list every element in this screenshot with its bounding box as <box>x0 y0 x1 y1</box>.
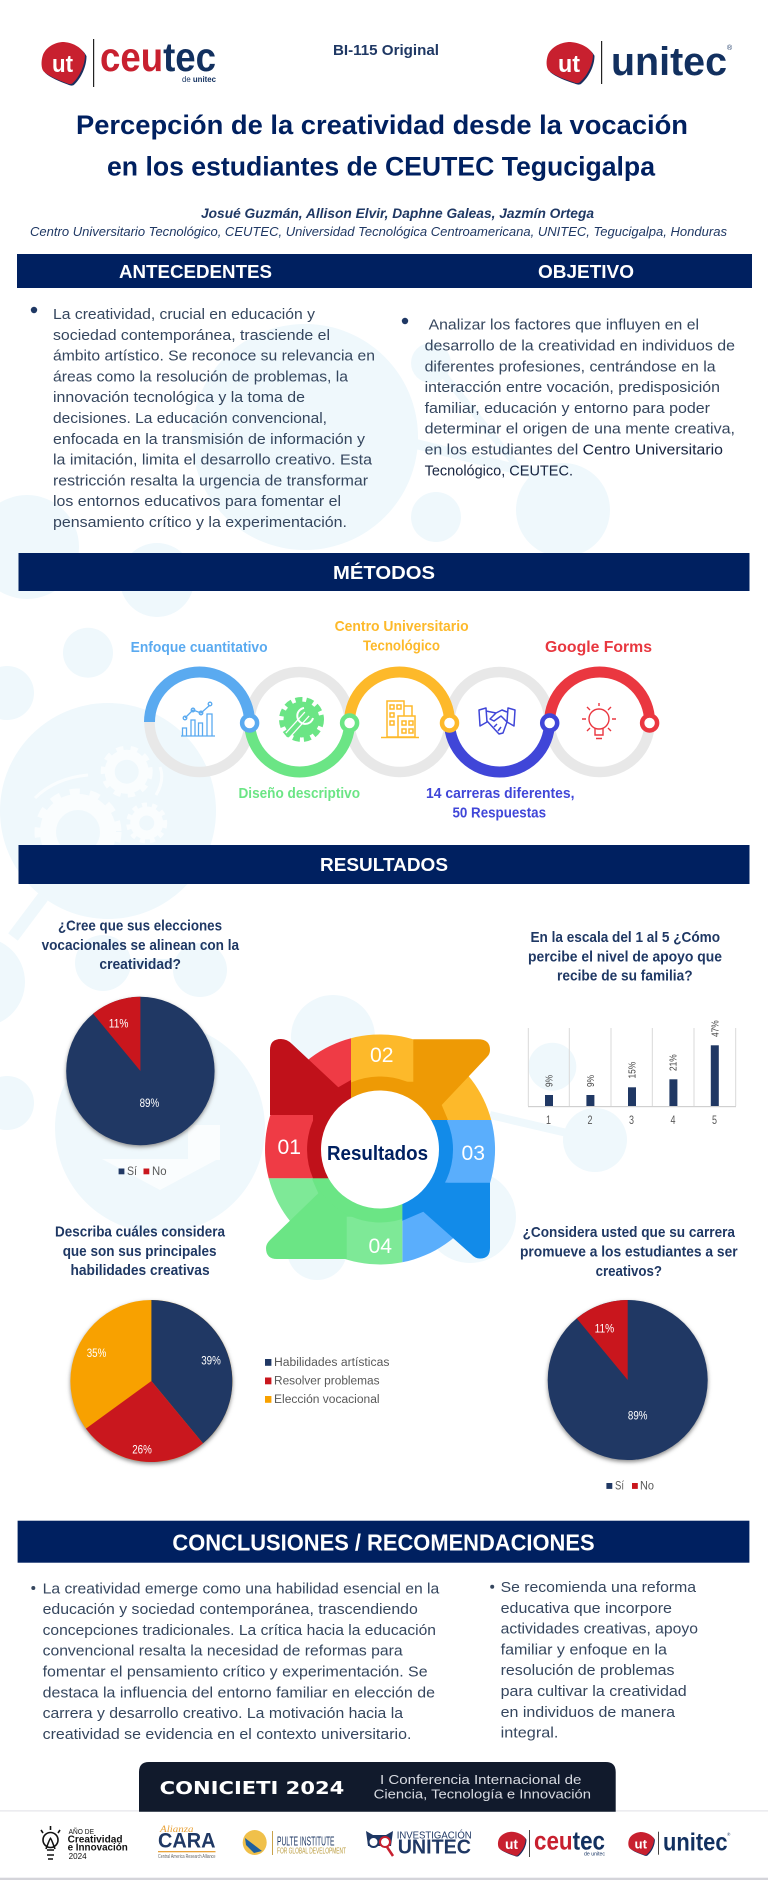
label: google forms: Google Forms <box>545 639 652 656</box>
text block: objetivo: Analizar los factores que influyen en el <box>429 317 699 334</box>
footer logo: cara: CARA <box>158 1830 216 1853</box>
icon: bar chart <box>181 702 215 736</box>
bar chart: family support: 9% <box>544 1075 555 1087</box>
label: carreras y respuestas <box>426 785 574 822</box>
text block: objetivo: diferentes profesiones, centrándose en la <box>425 358 716 375</box>
text block: antecedentes: restricción resalta la urgencia de transformar <box>53 472 368 489</box>
bar chart: family support: 4 <box>670 1115 676 1127</box>
footer logo: pulte institute <box>243 1830 346 1856</box>
central results pinwheel: 02 <box>370 1044 394 1067</box>
central results pinwheel: 04 <box>368 1235 392 1258</box>
affiliation: Centro Universitario Tecnológico, CEUTEC, Universidad Tecnológica Centroamericana, UNITEC, Tegucigalpa, Honduras <box>30 224 727 239</box>
text block: conclusiones: fomentar el pensamiento crítico y experimentación. Se <box>43 1664 428 1680</box>
text block: antecedentes: ámbito artístico. Se reconoce su relevancia en <box>53 348 375 365</box>
legend: question 1: No <box>152 1166 166 1178</box>
chart question 4 title: promueve a los estudiantes a ser <box>520 1244 738 1261</box>
chart question 3 title: que son sus principales <box>63 1243 217 1260</box>
text block: objetivo: familiar, educación y entorno para poder <box>425 400 710 417</box>
legend: question 4 <box>606 1480 654 1492</box>
legend: question 1: Sí <box>127 1166 138 1178</box>
chart question 3 title <box>55 1224 226 1279</box>
text block: conclusiones: La creatividad emerge como una habilidad esencial en la <box>43 1580 440 1597</box>
chart question 1 title: vocacionales se alinean con la <box>42 937 240 954</box>
label: centro universitario <box>335 618 469 655</box>
text block: recomendaciones: resolución de problemas <box>501 1662 674 1679</box>
pie chart: question 1 <box>66 997 215 1147</box>
heading bar: conclusiones <box>18 1521 749 1563</box>
footer logo: ceutec: ceutec <box>534 1825 605 1855</box>
bar chart: family support: 21% <box>669 1054 680 1071</box>
label: centro universitario: Centro Universitario <box>335 618 469 635</box>
text block: objetivo: desarrollo de la creatividad en individuos de <box>425 338 735 354</box>
heading bar: antecedentes and objetivo <box>17 254 752 288</box>
chart question 1 title <box>42 918 240 973</box>
text block: recomendaciones: educativa que incorpore <box>501 1600 672 1617</box>
logo: unitec <box>547 40 733 85</box>
label: carreras y respuestas: 50 Respuestas <box>452 805 546 822</box>
pie chart: question 4: 89% <box>628 1408 648 1422</box>
logo: unitec: ut <box>558 51 580 78</box>
text block: conclusiones: carrera y desarrollo creativo. La motivación hacia la <box>43 1705 404 1722</box>
bar chart: family support <box>528 1020 736 1127</box>
pie chart: question 3: 35% <box>87 1346 107 1360</box>
legend: question 4: No <box>640 1480 654 1492</box>
text block: recomendaciones: integral. <box>501 1725 558 1742</box>
pie chart: question 4 <box>548 1300 708 1462</box>
bar chart: family support: 9% <box>586 1075 597 1087</box>
chart question 2 title: percibe el nivel de apoyo que <box>528 948 722 965</box>
title <box>76 110 688 182</box>
logo: unitec: ® <box>727 44 733 52</box>
footer logo: cara: Central America Research Alliance <box>158 1854 216 1860</box>
chain of method rings <box>150 672 657 772</box>
footer logo: ano de creatividad: 2024 <box>69 1851 87 1861</box>
pie chart: question 1: 89% <box>140 1096 159 1110</box>
bar chart: family support: 2 <box>588 1115 592 1127</box>
label: carreras y respuestas: 14 carreras diferentes, <box>426 785 574 802</box>
icon: gear and wrench <box>282 700 322 740</box>
icon: lightbulb <box>582 703 616 738</box>
text block: recomendaciones: familiar y enfoque en la <box>501 1641 668 1658</box>
conference banner: I Conferencia Internacional de <box>380 1772 581 1787</box>
label: diseno descriptivo: Diseño descriptivo <box>238 785 360 802</box>
chart question 1 title: ¿Cree que sus elecciones <box>58 918 222 935</box>
central results pinwheel: 03 <box>462 1142 485 1165</box>
icon: buildings <box>381 701 419 738</box>
text block: objetivo: Tecnológico, CEUTEC. <box>425 462 573 479</box>
text block: conclusiones: destaca la influencia del entorno familiar en elección de <box>43 1684 435 1701</box>
heading bar: conclusiones: CONCLUSIONES / RECOMENDACIONES <box>172 1530 595 1556</box>
logo: ceutec: de unitec <box>182 75 217 84</box>
footer logo: cara: Alianza <box>159 1824 194 1834</box>
heading bar: antecedentes and objetivo: ANTECEDENTES <box>119 262 272 282</box>
chart question 4 title: creativos? <box>596 1263 662 1280</box>
legend: question 3: Habilidades artísticas <box>274 1357 390 1369</box>
footer logo: investigacion unitec <box>366 1828 472 1858</box>
text block: antecedentes: los entornos educativos para fomentar el <box>53 493 341 510</box>
text block: antecedentes: pensamiento crítico y la experimentación. <box>53 514 347 531</box>
central results pinwheel: 01 <box>278 1136 301 1159</box>
logo: ceutec: ut <box>52 51 73 78</box>
text block: antecedentes: innovación tecnológica y la toma de <box>53 389 305 406</box>
footer logo: cara <box>158 1824 216 1860</box>
central results pinwheel: Resultados <box>327 1143 428 1165</box>
text block: recomendaciones <box>490 1579 698 1742</box>
heading bar: metodos: MÉTODOS <box>333 562 435 583</box>
heading bar: resultados <box>18 845 750 884</box>
icon: handshake <box>479 708 515 734</box>
legend: question 3 <box>265 1357 390 1406</box>
logo: unitec: unitec <box>611 40 727 84</box>
text block: conclusiones: creatividad se evidencia en el contexto universitario. <box>43 1726 411 1743</box>
text block: antecedentes: decisiones. La educación convencional, <box>53 410 327 427</box>
code label: BI-115 Original <box>333 42 439 59</box>
chart question 4 title: ¿Considera usted que su carrera <box>523 1224 736 1241</box>
footer logo: pulte institute: FOR GLOBAL DEVELOPMENT <box>277 1847 346 1856</box>
chart question 1 title: creatividad? <box>99 956 181 973</box>
text block: conclusiones <box>31 1580 440 1743</box>
heading bar: antecedentes and objetivo: OBJETIVO <box>538 262 634 282</box>
text block: recomendaciones: actividades creativas, apoyo <box>501 1621 698 1638</box>
footer logo: ano de creatividad: AÑO DE <box>69 1827 94 1836</box>
pie chart: question 3: 26% <box>132 1442 152 1456</box>
bar chart: family support: 1 <box>546 1115 551 1127</box>
text block: antecedentes: áreas como la resolución de problemas, la <box>53 368 349 385</box>
legend: question 4: Sí <box>615 1480 625 1492</box>
footer logo: unitec: ® <box>727 1831 731 1837</box>
label: enfoque cuantitativo: Enfoque cuantitativo <box>131 639 268 656</box>
text block: antecedentes: la imitación, limita el desarrollo creativo. Esta <box>53 452 373 469</box>
bar chart: family support: 5 <box>712 1115 717 1127</box>
logo: ceutec <box>42 34 217 87</box>
text block: antecedentes: enfocada en la transmisión de información y <box>53 431 366 448</box>
footer logo: unitec: ut <box>634 1836 648 1852</box>
text block: recomendaciones: Se recomienda una reforma <box>501 1579 697 1596</box>
footer strip <box>0 1810 768 1880</box>
text block: conclusiones: convencional resalta la necesidad de reformas para <box>43 1643 403 1660</box>
chart question 2 title: recibe de su familia? <box>557 968 693 985</box>
chart question 2 title: En la escala del 1 al 5 ¿Cómo <box>530 929 720 946</box>
text block: antecedentes: sociedad contemporánea, trasciende el <box>53 327 330 344</box>
authors: Josué Guzmán, Allison Elvir, Daphne Galeas, Jazmín Ortega <box>201 205 594 221</box>
legend: question 3: Resolver problemas <box>274 1376 380 1388</box>
text block: antecedentes: La creatividad, crucial en educación y <box>53 306 316 323</box>
title: en los estudiantes de CEUTEC Tegucigalpa <box>107 152 656 182</box>
label: centro universitario: Tecnológico <box>363 638 440 655</box>
footer logo: ceutec: de unitec <box>584 1852 606 1858</box>
chart question 3 title: habilidades creativas <box>70 1262 210 1279</box>
text block: conclusiones: concepciones tradicionales. La crítica hacia la educación <box>43 1622 436 1639</box>
text block: recomendaciones: para cultivar la creatividad <box>501 1683 687 1700</box>
text block: recomendaciones: en individuos de manera <box>501 1704 676 1721</box>
legend: question 1 <box>119 1166 166 1178</box>
footer logo: ano de creatividad: Creatividad <box>68 1833 122 1845</box>
bar chart: family support: 15% <box>627 1062 638 1078</box>
text block: objetivo <box>402 317 735 479</box>
footer logo: ceutec <box>498 1825 606 1858</box>
text block: antecedentes <box>31 306 375 531</box>
logo: ceutec: ceutec <box>100 34 216 80</box>
footer logo: ano de creatividad: e Innovación <box>68 1842 128 1854</box>
text block: objetivo: en los estudiantes del Centro Universitario <box>425 442 723 458</box>
pie chart: question 1: 11% <box>109 1016 129 1030</box>
footer logo: ceutec: ut <box>505 1836 518 1852</box>
pie chart: question 3 <box>70 1300 232 1464</box>
footer logo: investigacion unitec: INVESTIGACIÓN <box>397 1828 472 1841</box>
conference banner: CONICIETI 2024 <box>160 1779 344 1799</box>
footer logo: pulte institute: PULTE INSTITUTE <box>277 1834 335 1849</box>
conference banner <box>139 1762 616 1812</box>
bar chart: family support: 47% <box>711 1020 722 1037</box>
heading bar: resultados: RESULTADOS <box>320 855 448 875</box>
legend: question 3: Elección vocacional <box>274 1394 380 1406</box>
title: Percepción de la creatividad desde la vocación <box>76 110 688 140</box>
footer logo: unitec <box>628 1829 731 1857</box>
footer logo: ano de creatividad <box>41 1826 128 1861</box>
pie chart: question 4: 11% <box>595 1322 614 1336</box>
chart question 2 title <box>528 929 722 985</box>
text block: objetivo: interacción entre vocación, predisposición <box>425 379 720 396</box>
background pattern <box>0 324 627 1280</box>
conference banner: Ciencia, Tecnología e Innovación <box>374 1786 591 1801</box>
text block: objetivo: determinar el origen de una mente creativa, <box>425 421 735 438</box>
central results pinwheel <box>265 1034 495 1264</box>
heading bar: metodos <box>18 553 750 591</box>
footer logo: investigacion unitec: UNITEC <box>398 1836 471 1858</box>
chart question 4 title <box>520 1224 738 1280</box>
pie chart: question 3: 39% <box>201 1354 221 1368</box>
text block: conclusiones: educación y sociedad contemporánea, trascendiendo <box>43 1601 418 1618</box>
chart question 3 title: Describa cuáles considera <box>55 1224 226 1241</box>
footer logo: unitec: unitec <box>663 1829 728 1857</box>
bar chart: family support: 3 <box>629 1115 634 1127</box>
